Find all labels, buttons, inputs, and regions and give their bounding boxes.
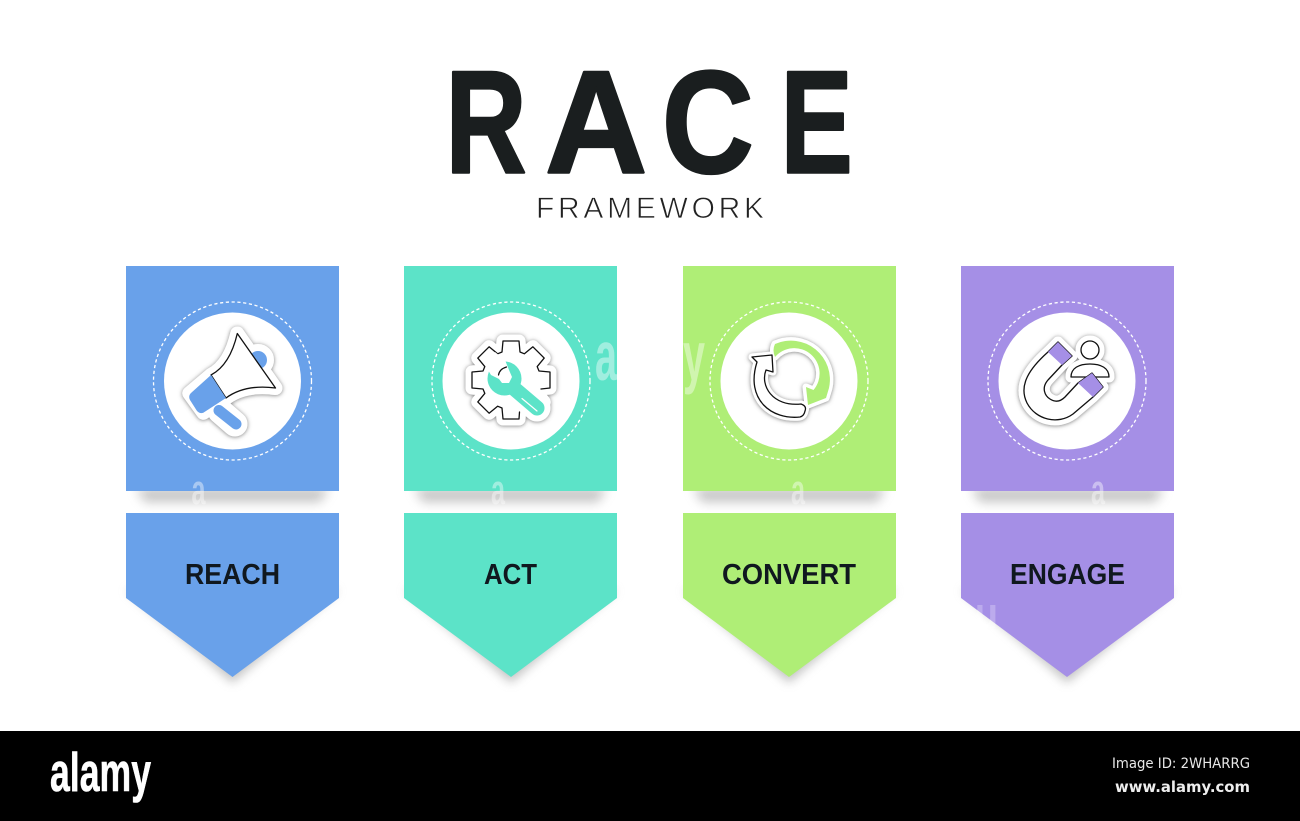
icon circle: [154, 302, 312, 460]
chevron shadow: [961, 590, 1174, 683]
label: REACH: [185, 559, 280, 591]
watermark fragments: u: [975, 589, 998, 638]
icon: megaphone: [189, 334, 276, 424]
watermark fragments: y: [683, 317, 705, 395]
panel: act: [404, 266, 617, 683]
card: [961, 266, 1174, 491]
panel: reach: [126, 266, 339, 683]
chevron: [683, 513, 896, 677]
card: [404, 266, 617, 491]
image id: Image ID: 2WHARRG: [1112, 756, 1250, 772]
black outline arrow: [752, 355, 806, 417]
chevron shadow: [683, 590, 896, 683]
title: RACE: [445, 40, 853, 204]
panel: convert: [683, 266, 896, 683]
card shadow: [136, 488, 329, 502]
watermark fragments: a: [595, 317, 618, 395]
watermark fragments: a: [491, 466, 505, 513]
chevron: [126, 513, 339, 677]
watermark fragments: a: [192, 466, 206, 513]
title: RACE: C: [662, 40, 754, 203]
icon: gear and wrench: [472, 341, 550, 419]
icon: magnet and person: [1024, 341, 1109, 420]
icon circle: [432, 302, 590, 460]
label: CONVERT: [722, 559, 856, 591]
watermark fragments: a: [1091, 466, 1105, 513]
card shadow: [414, 488, 607, 502]
icon circle: [710, 302, 868, 460]
card: [126, 266, 339, 491]
title: RACE: R: [445, 40, 527, 204]
chevron shadow: [404, 590, 617, 683]
icon circle: [988, 302, 1146, 460]
label: ACT: [484, 559, 537, 591]
chevron: [404, 513, 617, 677]
green arrow: [774, 341, 830, 405]
panel: engage: [961, 266, 1174, 683]
label: ENGAGE: [1010, 559, 1125, 591]
icon: cycle arrows: [752, 341, 830, 417]
watermark fragments: a: [791, 466, 805, 513]
footer logo: alamy: [50, 741, 151, 803]
card shadow: [693, 488, 886, 502]
watermark fragments: [192, 317, 1105, 638]
title: RACE: A: [545, 42, 647, 204]
website: www.alamy.com: [1115, 778, 1250, 796]
footer bar: [0, 731, 1300, 821]
card shadow: [971, 488, 1164, 502]
chevron: [961, 513, 1174, 677]
card: [683, 266, 896, 491]
chevron shadow: [126, 590, 339, 683]
person: [1071, 341, 1109, 377]
title: RACE: E: [781, 42, 853, 204]
magnet: [1024, 342, 1103, 420]
subtitle: FRAMEWORK: FRAMEWORK: [536, 192, 764, 225]
